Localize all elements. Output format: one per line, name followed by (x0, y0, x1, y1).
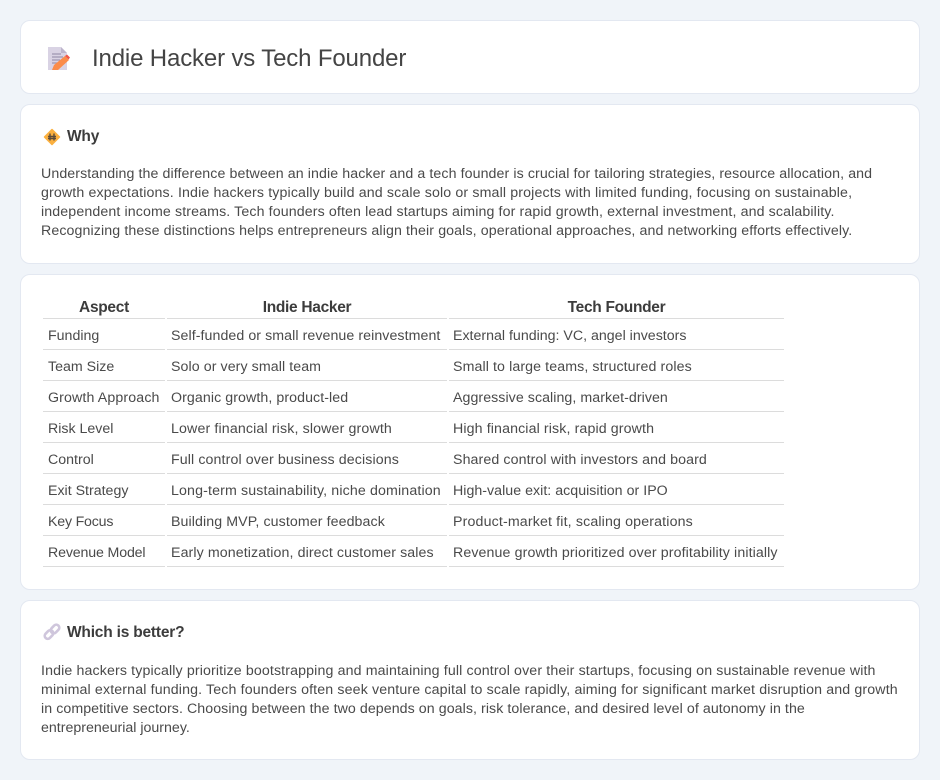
row: team size (43, 359, 784, 381)
table header: aspect: Aspect (79, 299, 129, 316)
table header: indie hacker (167, 298, 447, 319)
row: revenue model (43, 545, 784, 567)
panel: header (20, 20, 920, 94)
row: funding (43, 328, 784, 350)
row: team size: Small to large teams, structured roles (453, 359, 692, 375)
row: funding: Self-funded or small revenue reinvestment (171, 328, 440, 344)
text block: which is better: in competitive sectors. Choosing between the two depends on goals, risk tolerance, and desired level of autonomy in the (41, 701, 805, 717)
row: exit strategy: High-value exit: acquisition or IPO (453, 483, 668, 499)
row: growth approach: Aggressive scaling, market-driven (453, 390, 668, 406)
text block: why: Understanding the difference between an indie hacker and a tech founder is crucial for tailoring strategies, resource allocation, and (41, 166, 872, 182)
row: growth approach: Growth Approach (48, 390, 160, 406)
text block: which is better (41, 663, 898, 736)
table header: indie hacker: Indie Hacker (263, 299, 351, 316)
row: growth approach (43, 390, 784, 412)
row: revenue model: Early monetization, direct customer sales (171, 545, 434, 561)
text block: why: independent income streams. Tech founders often lead startups aiming for rapid growth, external investment, and scalability. (41, 204, 835, 220)
text block: which is better: entrepreneurial journey. (41, 720, 190, 736)
row: revenue model: Revenue growth prioritized over profitability initially (453, 545, 778, 561)
row: funding: External funding: VC, angel investors (453, 328, 686, 344)
text block: which is better: Indie hackers typically prioritize bootstrapping and maintaining full control over their startups, focusing on sustainable revenue with (41, 663, 876, 679)
text block: why: Recognizing these distinctions helps entrepreneurs align their goals, operational approaches, and networking efforts effectively. (41, 223, 852, 239)
row: risk level: Risk Level (48, 421, 113, 437)
panel: why (20, 104, 920, 264)
row: key focus: Key Focus (48, 514, 113, 530)
panel: which is better (20, 600, 920, 760)
row: exit strategy: Long-term sustainability, niche domination (171, 483, 441, 499)
row: control: Shared control with investors and board (453, 452, 707, 468)
row: team size: Team Size (48, 359, 114, 375)
heading: why: Why (67, 128, 99, 145)
icon: warning diamond (44, 128, 60, 146)
row: growth approach: Organic growth, product-led (171, 390, 348, 406)
row: revenue model: Revenue Model (48, 545, 145, 561)
row: risk level: Lower financial risk, slower growth (171, 421, 392, 437)
row: key focus: Building MVP, customer feedback (171, 514, 385, 530)
row: control: Control (48, 452, 94, 468)
title: Indie Hacker vs Tech Founder (92, 45, 406, 72)
row: control (43, 452, 784, 474)
row: risk level: High financial risk, rapid growth (453, 421, 654, 437)
row: exit strategy (43, 483, 784, 505)
row: key focus: Product-market fit, scaling operations (453, 514, 693, 530)
table header: tech founder: Tech Founder (568, 299, 665, 316)
row: risk level (43, 421, 784, 443)
text block: which is better: minimal external funding. Tech founders often seek venture capital to scale rapidly, aiming for significant market disruption and growth (41, 682, 898, 698)
row: exit strategy: Exit Strategy (48, 483, 128, 499)
text block: why: growth expectations. Indie hackers typically build and scale solo or small projects with limited funding, focusing on sustainable, (41, 185, 852, 201)
text block: why (41, 166, 872, 239)
row: team size: Solo or very small team (171, 359, 321, 375)
icon: document with pencil (48, 47, 70, 70)
table header: tech founder (449, 298, 784, 319)
row: control: Full control over business decisions (171, 452, 399, 468)
panel: comparison table (20, 274, 920, 590)
heading: which is better: Which is better? (67, 624, 184, 641)
row: key focus (43, 514, 784, 536)
row: funding: Funding (48, 328, 99, 344)
table header: aspect (43, 298, 165, 319)
icon: link (44, 623, 60, 640)
